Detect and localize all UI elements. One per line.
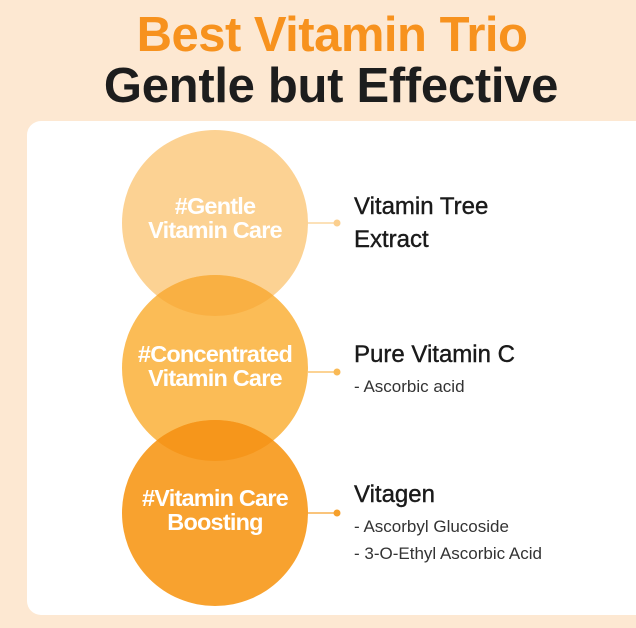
- circle: gentle vitamin care: Vitamin Care: [148, 217, 283, 243]
- text: vitagen: Vitagen: [354, 481, 435, 508]
- text: pure vitamin c: [354, 341, 515, 396]
- panel: white card: [27, 121, 636, 615]
- circle: concentrated vitamin care: [122, 275, 308, 440]
- title: Best Vitamin Trio: [137, 8, 527, 62]
- circle: vitamin care boosting: Boosting: [167, 509, 263, 535]
- title: Gentle but Effective: [104, 59, 558, 113]
- text: pure vitamin c: - Ascorbic acid: [354, 377, 465, 396]
- circle: gentle vitamin care: #Gentle: [175, 193, 256, 219]
- text: vitagen: - 3-O-Ethyl Ascorbic Acid: [354, 544, 542, 563]
- circle: concentrated vitamin care: Vitamin Care: [148, 365, 283, 391]
- circle: gentle vitamin care: [122, 130, 308, 316]
- title: [104, 8, 558, 113]
- circle: vitamin care boosting: [122, 420, 308, 606]
- text: vitamin tree extract: [354, 193, 488, 253]
- circle: vitamin care boosting: #Vitamin Care: [142, 485, 289, 511]
- text: vitamin tree extract: Extract: [354, 226, 429, 253]
- text: vitagen: [354, 481, 542, 563]
- text: vitamin tree extract: Vitamin Tree: [354, 193, 488, 220]
- circle: concentrated vitamin care: #Concentrated: [138, 341, 292, 367]
- connectors: [308, 220, 340, 516]
- text: pure vitamin c: Pure Vitamin C: [354, 341, 515, 368]
- text: vitagen: - Ascorbyl Glucoside: [354, 517, 509, 536]
